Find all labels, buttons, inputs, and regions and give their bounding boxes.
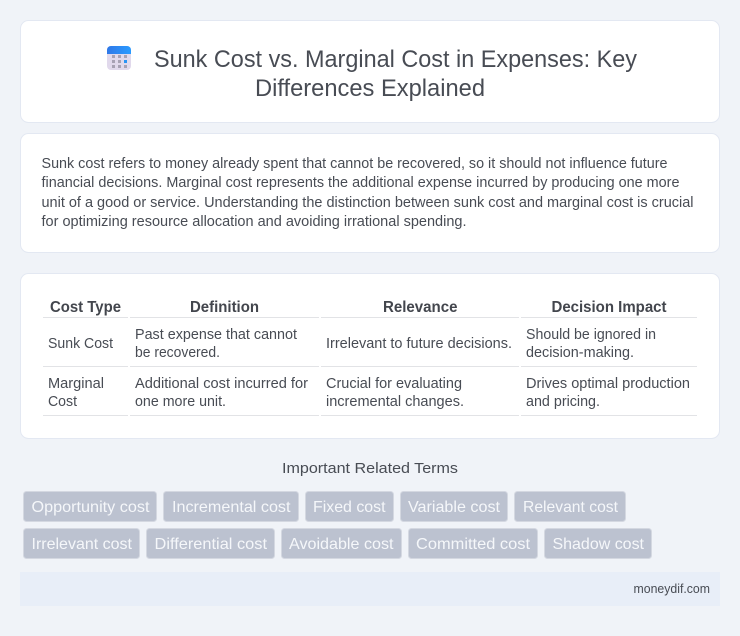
tags: related terms: Avoidable cost <box>289 536 394 553</box>
table row: marginal cost: one more unit. <box>135 394 226 410</box>
text block: summary: Sunk cost refers to money already spent that cannot be recovered, so it should not influence future <box>42 156 668 172</box>
title: Differences Explained <box>255 75 485 102</box>
tags: related terms: Relevant cost <box>523 499 619 516</box>
table row: marginal cost: Cost <box>48 394 77 410</box>
table row: sunk cost <box>48 327 656 361</box>
table row: sunk cost: decision-making. <box>526 345 634 361</box>
icon: calendar <box>107 46 131 70</box>
table row: sunk cost: Irrelevant to future decisions. <box>326 336 512 352</box>
table row: marginal cost: incremental changes. <box>326 394 464 410</box>
panel: title header <box>20 20 720 122</box>
tags: related terms: Committed cost <box>416 536 531 553</box>
table row: marginal cost: Crucial for evaluating <box>326 376 462 392</box>
table row: sunk cost: be recovered. <box>135 345 220 361</box>
table header: Cost Type <box>50 299 121 316</box>
tags: related terms: Incremental cost <box>172 499 291 516</box>
tags: related terms: Variable cost <box>408 499 501 516</box>
title <box>154 46 637 102</box>
table row: sunk cost: Past expense that cannot <box>135 327 297 343</box>
tags: related terms: Shadow cost <box>552 536 645 553</box>
table header: Relevance <box>383 299 458 316</box>
footer: moneydif.com <box>634 582 710 596</box>
table row: marginal cost <box>48 376 690 410</box>
table header <box>50 299 667 316</box>
panel: comparison table <box>20 274 720 438</box>
footer <box>20 572 720 606</box>
heading: related terms: Important Related Terms <box>282 461 458 477</box>
text block: summary: financial decisions. Marginal cost represents the additional expense incurred by producing one more <box>42 175 680 191</box>
text block: summary: unit of a good or service. Understanding the distinction between sunk cost and marginal cost is crucial <box>42 195 694 211</box>
text block: summary <box>42 156 694 230</box>
tags: related terms <box>24 492 652 558</box>
table header: Decision Impact <box>552 299 667 316</box>
tags: related terms: Fixed cost <box>313 499 386 516</box>
table row: marginal cost: Additional cost incurred for <box>135 376 308 392</box>
table row: marginal cost: Drives optimal production <box>526 376 690 392</box>
text block: summary: for optimizing resource allocation and avoiding irrational spending. <box>42 214 466 230</box>
title: Sunk Cost vs. Marginal Cost in Expenses: Key <box>154 46 637 73</box>
table row: marginal cost: Marginal <box>48 376 104 392</box>
tags: related terms: Irrelevant cost <box>32 536 133 553</box>
table header: Definition <box>190 299 259 316</box>
table row: sunk cost: Sunk Cost <box>48 336 113 352</box>
table row: marginal cost: and pricing. <box>526 394 600 410</box>
tags: related terms: Differential cost <box>154 536 268 553</box>
tags: related terms: Opportunity cost <box>32 499 150 516</box>
table row: sunk cost: Should be ignored in <box>526 327 656 343</box>
panel: summary paragraph <box>20 134 720 252</box>
